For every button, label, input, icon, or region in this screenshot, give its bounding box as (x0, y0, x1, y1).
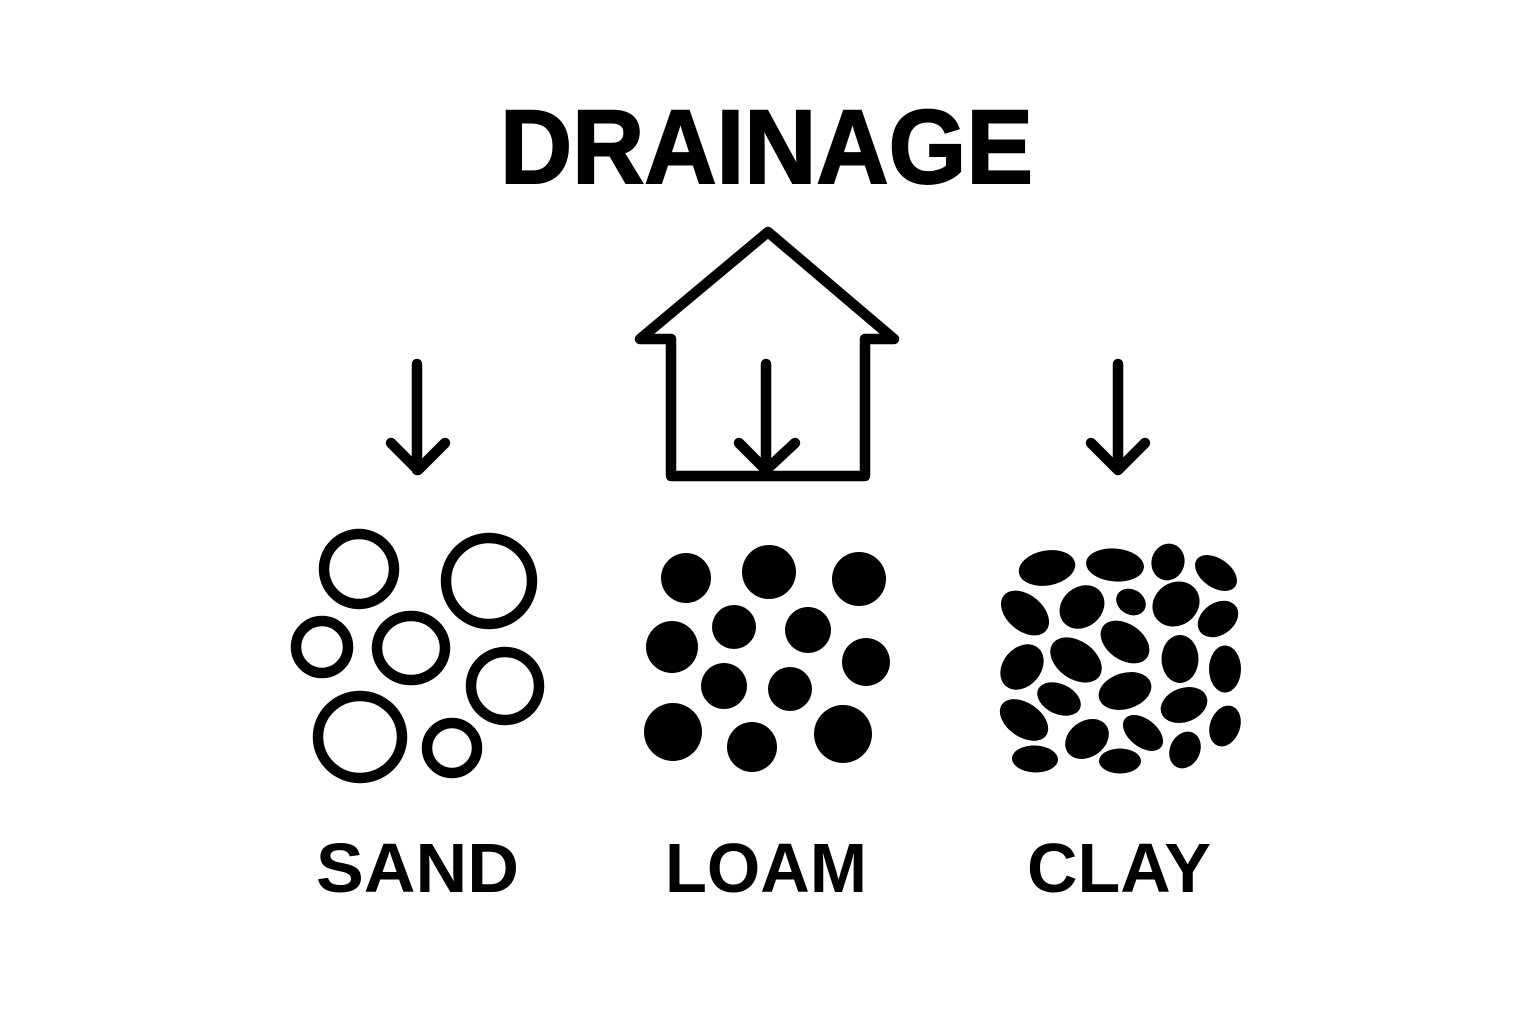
icon: clay particles (991, 540, 1246, 774)
label: clay: CLAY (1027, 829, 1211, 907)
arrow: into sand (391, 364, 445, 470)
icon: sand particles (296, 534, 539, 778)
arrow: into clay (1091, 364, 1145, 470)
label: loam: LOAM (665, 829, 867, 907)
title: DRAINAGE (500, 89, 1033, 206)
icon: house with drainage arrow (640, 232, 894, 476)
icon: loam particles (644, 545, 890, 772)
label: sand: SAND (316, 829, 519, 907)
